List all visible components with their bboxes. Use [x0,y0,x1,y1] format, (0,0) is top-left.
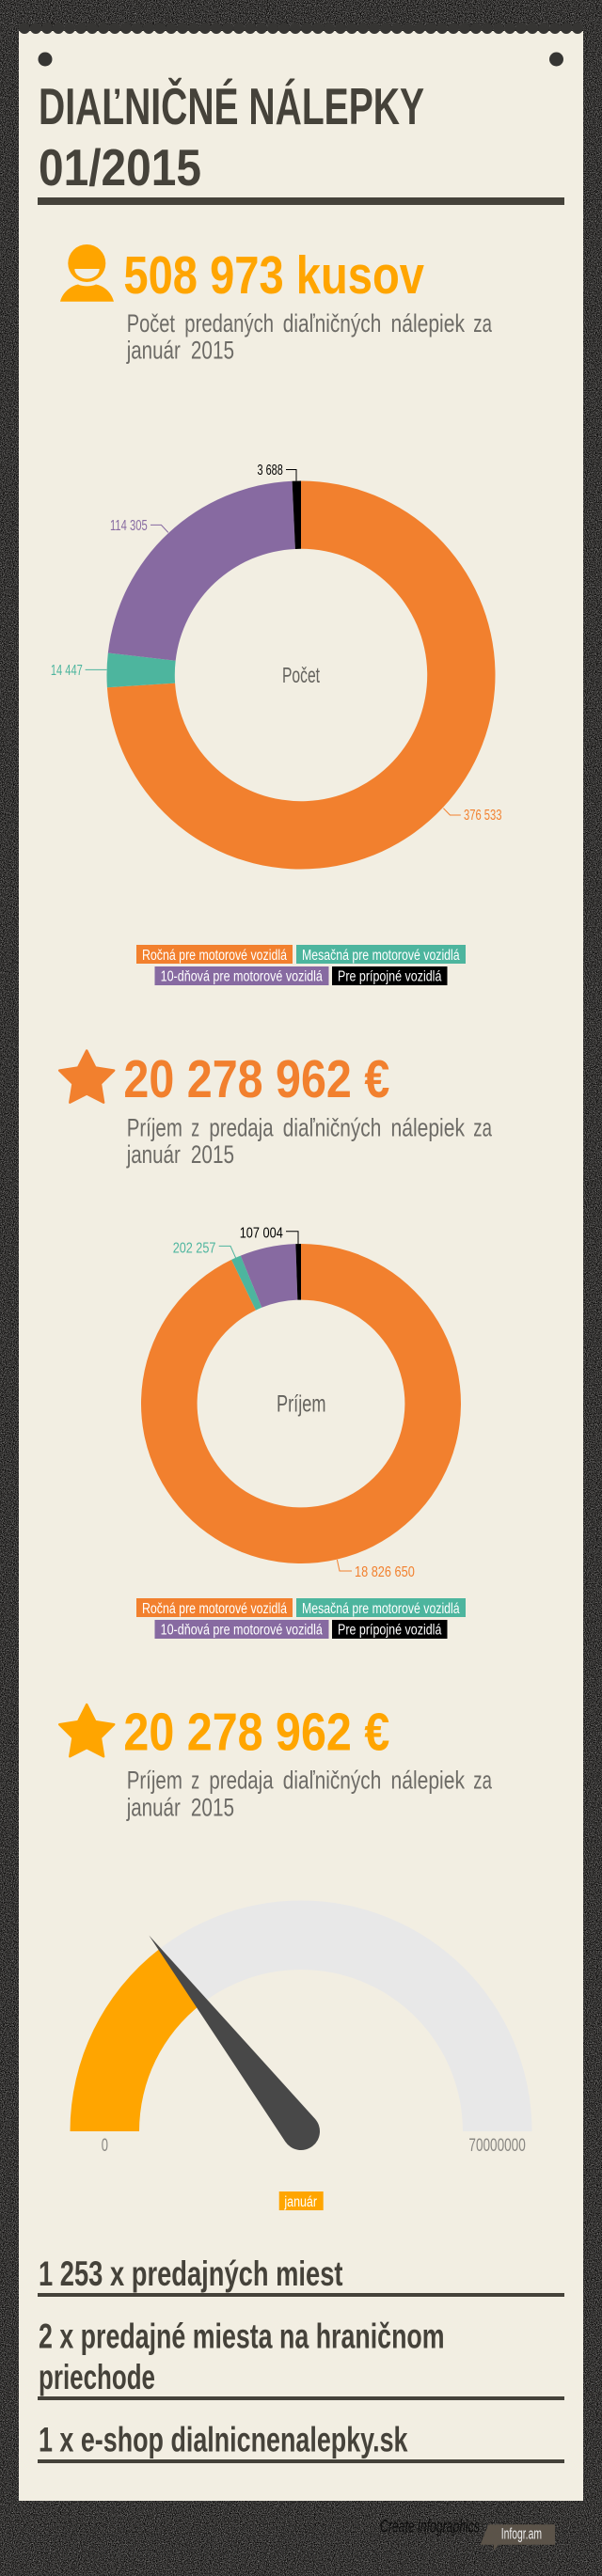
fact: border points: 2 x predajné miesta na hraničnom [39,2317,445,2356]
legend: revenue donut: Ročná pre motorové vozidlá [142,1601,287,1617]
legend: count donut [136,945,466,985]
description: tickets sold: za [473,309,493,338]
title: DIAĽNIČNÉ NÁLEPKY [39,77,424,135]
description: revenue repeat: za [473,1766,493,1794]
description: revenue: z [191,1113,199,1141]
fact: e-shop: 1 x e-shop dialnicnenalepky.sk [39,2421,408,2459]
description: revenue: Príjem [127,1113,182,1141]
legend: count donut: Mesačná pre motorové vozidlá [302,948,460,964]
fact: border points [38,2317,564,2400]
description: revenue: nálepiek [391,1113,465,1141]
chart: revenue donut: 107 004 [240,1225,283,1241]
description: revenue repeat: 2015 [191,1793,234,1821]
legend: count donut: 10-dňová pre motorové vozidlá [161,968,323,985]
chart: revenue donut: 202 257 [173,1241,215,1256]
chart: count donut [51,463,502,869]
chart: revenue donut: Príjem [277,1391,325,1418]
description: revenue: za [473,1113,493,1141]
chart: count donut: 114 305 [110,518,148,534]
stat: revenue repeat: 20 278 962 € [123,1702,389,1762]
icon: yellow star [59,1704,114,1756]
footer credit: Create infographics [380,2518,480,2537]
description: tickets sold: január [126,337,181,365]
description: revenue repeat: nálepiek [391,1766,465,1794]
description: revenue repeat [126,1766,493,1821]
chart: revenue donut [141,1225,461,1580]
chart: count donut: 3 688 [258,463,283,479]
description: revenue repeat: január [126,1793,181,1821]
legend: count donut: Pre prípojné vozidlá [338,968,442,985]
description: revenue: január [126,1140,181,1169]
description: revenue repeat: diaľničných [283,1766,381,1794]
title [38,77,564,205]
footer credit [380,2518,555,2551]
description: revenue repeat: z [191,1766,199,1794]
legend: revenue donut: Mesačná pre motorové vozidlá [302,1601,460,1617]
description: revenue [126,1113,493,1169]
description: tickets sold: predaných [184,309,274,338]
description: tickets sold: Počet [127,309,175,338]
legend: gauge: január [284,2194,317,2210]
legend: revenue donut: 10-dňová pre motorové vozidlá [161,1623,323,1638]
chart: count donut: Počet [282,663,320,687]
description: tickets sold: diaľničných [283,309,381,338]
chart: gauge [70,1901,532,2156]
description: revenue repeat: Príjem [127,1766,182,1794]
legend: revenue donut [136,1598,466,1639]
chart: count donut: 14 447 [51,663,83,679]
fact: sales points: 1 253 x predajných miest [39,2254,342,2293]
icon: person [60,244,114,302]
description: revenue repeat: predaja [209,1766,274,1794]
legend: count donut: Ročná pre motorové vozidlá [142,948,287,964]
description: revenue: 2015 [191,1140,234,1169]
description: revenue: diaľničných [283,1113,381,1141]
footer credit: Infogr.am [501,2525,542,2543]
description: tickets sold: nálepiek [391,309,465,338]
stat: revenue: 20 278 962 € [123,1049,389,1109]
description: tickets sold: 2015 [191,337,234,365]
chart: revenue donut: 18 826 650 [355,1564,415,1580]
fact: border points: priechode [39,2358,155,2396]
icon: orange star [59,1051,114,1103]
description: tickets sold [126,309,493,365]
legend: revenue donut: Pre prípojné vozidlá [338,1623,442,1638]
chart: count donut: 376 533 [464,808,502,824]
chart: gauge: 70000000 [468,2136,526,2156]
description: revenue: predaja [209,1113,274,1141]
title: 01/2015 [39,138,201,196]
stat: tickets sold: 508 973 kusov [123,245,424,306]
chart: gauge: 0 [102,2136,108,2156]
